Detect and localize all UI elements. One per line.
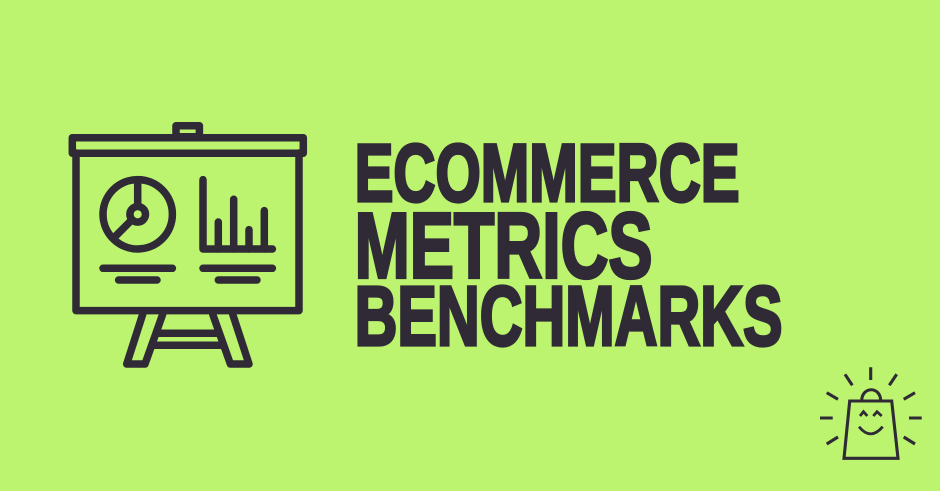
board top bar bbox=[72, 138, 303, 153]
right caption lines bbox=[203, 268, 272, 280]
logo: smiling shopping bag bbox=[820, 367, 922, 458]
board handle bbox=[176, 126, 199, 137]
easel legs bbox=[127, 314, 249, 364]
left caption lines bbox=[103, 268, 172, 280]
icon: presentation board bbox=[72, 126, 303, 364]
bag face bbox=[859, 412, 883, 434]
title bbox=[355, 128, 783, 363]
logo rays bbox=[820, 367, 922, 444]
board panel bbox=[76, 153, 299, 311]
icon: pie chart bbox=[103, 180, 172, 249]
icon: bar chart bbox=[203, 180, 272, 249]
bag handle bbox=[862, 390, 881, 401]
title line: METRICS: METRICS bbox=[355, 193, 653, 297]
bag body bbox=[844, 401, 898, 458]
title line: ECOMMERCE: ECOMMERCE bbox=[355, 128, 740, 219]
